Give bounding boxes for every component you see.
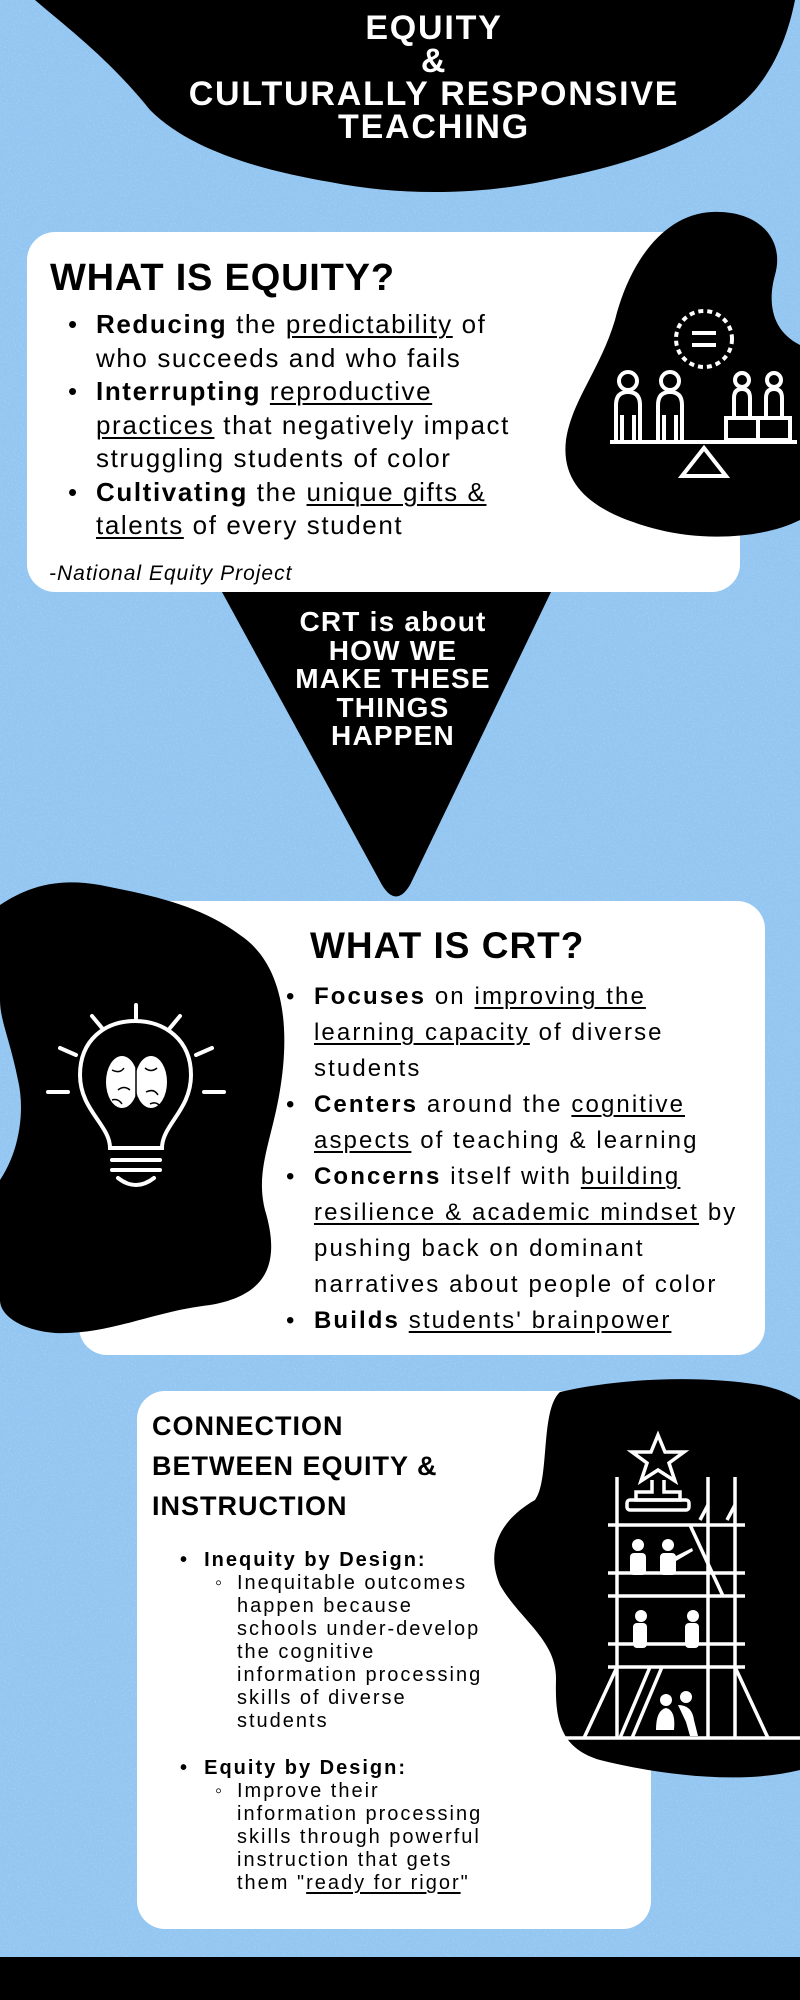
equity by design: [180, 1757, 482, 1894]
inequity by design: the cognitive: [237, 1641, 375, 1663]
equity by design: skills through powerful: [237, 1826, 481, 1848]
crt bullets: pushing back on dominant: [314, 1235, 645, 1262]
callout text: HOW WE: [329, 634, 457, 666]
inequity by design: • Inequity by Design:: [180, 1549, 427, 1571]
equity bullets: talents of every student: [96, 510, 403, 540]
crt bullets: [286, 983, 737, 1334]
heading: connection: INSTRUCTION: [152, 1491, 348, 1521]
equity bullets: Interrupting reproductive: [96, 376, 432, 406]
heading: connection: BETWEEN EQUITY &: [152, 1451, 438, 1481]
crt bullets: Focuses on improving the: [314, 983, 646, 1010]
crt bullets: aspects of teaching & learning: [314, 1127, 699, 1154]
heading: connection: [152, 1411, 438, 1521]
equity blob with scale icon: [565, 212, 800, 537]
inequity by design: happen because: [237, 1595, 413, 1617]
callout text: MAKE THESE: [295, 663, 491, 694]
panel: crt: •: [286, 1091, 297, 1118]
inequity by design: information processing: [237, 1664, 482, 1686]
crt bullets: learning capacity of diverse: [314, 1019, 664, 1046]
panel: equity: [27, 232, 740, 592]
footer bar: [0, 1957, 800, 2000]
title: [189, 9, 679, 146]
icon: balance: [610, 311, 797, 476]
title: &: [421, 42, 447, 80]
panel: equity: •: [68, 376, 79, 406]
panel: connection: [137, 1391, 651, 1929]
callout text: [295, 606, 491, 751]
crt blob with lightbulb icon: [0, 882, 284, 1334]
heading: connection: CONNECTION: [152, 1411, 344, 1441]
heading: what is equity: WHAT IS EQUITY?: [50, 257, 395, 299]
title: CULTURALLY RESPONSIVE: [189, 75, 679, 113]
equity bullets: Reducing the predictability of: [96, 309, 486, 339]
crt bullets: Centers around the cognitive: [314, 1091, 685, 1118]
inequity by design: ◦: [215, 1572, 224, 1594]
equity by design: them "ready for rigor": [237, 1872, 470, 1894]
title: EQUITY: [365, 9, 503, 47]
inequity by design: [180, 1549, 482, 1732]
scaffold blob with icon: [494, 1379, 800, 1778]
equity by design: Improve their: [237, 1780, 380, 1802]
equity by design: ◦: [215, 1780, 224, 1802]
inequity by design: students: [237, 1710, 329, 1732]
panel: crt: •: [286, 1307, 297, 1334]
inequity by design: Inequitable outcomes: [237, 1572, 467, 1594]
citation: -National Equity Project: [49, 562, 292, 585]
equity bullets: who succeeds and who fails: [96, 342, 461, 372]
equity bullets: [68, 309, 510, 540]
heading: what is crt: WHAT IS CRT?: [310, 925, 584, 966]
callout text: HAPPEN: [331, 720, 455, 751]
panel: crt: •: [286, 983, 297, 1010]
panel: equity: •: [68, 476, 79, 506]
title blob: [35, 0, 795, 192]
icon: scaffold: [553, 1435, 800, 1738]
crt bullets: Concerns itself with building: [314, 1163, 680, 1190]
inequity by design: skills of diverse: [237, 1687, 407, 1709]
icon: lightbulb brain: [48, 1005, 224, 1185]
equity bullets: Cultivating the unique gifts &: [96, 476, 486, 506]
crt bullets: resilience & academic mindset by: [314, 1199, 737, 1226]
title: TEACHING: [338, 108, 530, 146]
callout text: CRT is about: [299, 606, 487, 637]
panel: equity: •: [68, 309, 79, 339]
equity by design: • Equity by Design:: [180, 1757, 407, 1779]
panel: crt: •: [286, 1163, 297, 1190]
panel: crt: [79, 901, 765, 1355]
callout text: THINGS: [336, 692, 449, 722]
inequity by design: schools under-develop: [237, 1618, 480, 1640]
equity bullets: struggling students of color: [96, 443, 452, 473]
equity by design: information processing: [237, 1803, 482, 1825]
equity bullets: practices that negatively impact: [96, 410, 510, 440]
crt bullets: students: [314, 1055, 422, 1082]
crt bullets: Builds students' brainpower: [314, 1307, 671, 1334]
crt bullets: narratives about people of color: [314, 1271, 717, 1298]
triangle callout: [222, 592, 551, 896]
equity by design: instruction that gets: [237, 1849, 452, 1871]
